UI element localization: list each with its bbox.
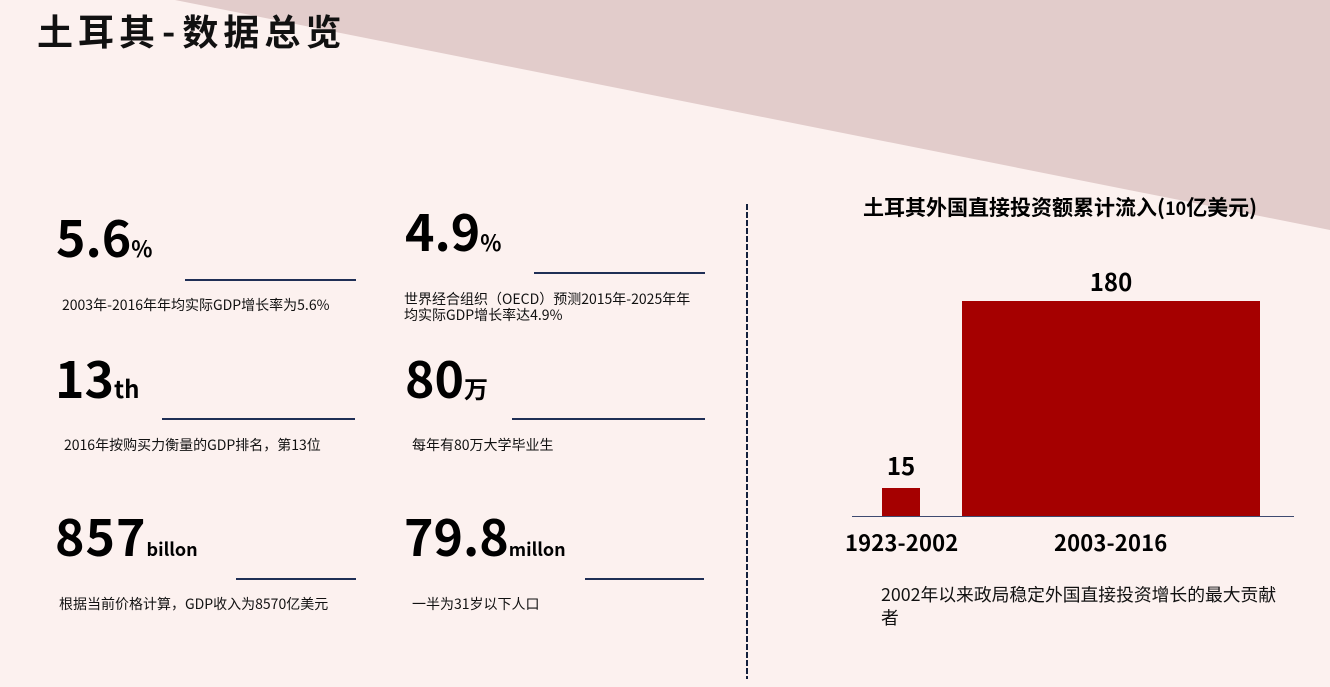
value: 80万	[405, 341, 488, 413]
stat: 79.8 millon	[404, 499, 704, 614]
stat: 80万	[405, 341, 705, 455]
value: 857billon	[55, 499, 198, 571]
description: 2003年-2016年年均实际GDP增长率为5.6%	[62, 295, 329, 315]
description: 根据当前价格计算，GDP收入为8570亿美元	[59, 594, 328, 614]
category: 2003-2016: 2003-2016	[1054, 526, 1167, 558]
bar: 2003-2016	[962, 301, 1260, 516]
stat: 5.6%	[56, 200, 356, 315]
description: 每年有80万大学毕业生	[412, 435, 554, 455]
title: 土耳其-数据总览	[37, 4, 346, 56]
rule	[162, 418, 355, 420]
description: 一半为31岁以下人口	[412, 594, 540, 614]
description: 世界经合组织（OECD）预测2015年-2025年年	[404, 289, 690, 309]
description	[404, 289, 690, 325]
value: 13th	[55, 341, 139, 413]
dashed divider	[746, 204, 748, 679]
category: 1923-2002: 1923-2002	[845, 526, 958, 558]
description: 均实际GDP增长率达4.9%	[404, 305, 562, 325]
rule	[185, 279, 356, 281]
stat: 13th	[55, 341, 355, 455]
bar chart	[845, 263, 1294, 558]
rule	[236, 578, 356, 580]
axis	[852, 516, 1294, 517]
value: 15: 15	[887, 447, 915, 482]
bar: 1923-2002	[882, 488, 920, 516]
chart title: 土耳其外国直接投资额累计流入(10亿美元)	[863, 192, 1257, 222]
value: 5.6%	[56, 200, 152, 272]
stat: 857 billon	[55, 499, 356, 614]
value: 180: 180	[1090, 263, 1132, 298]
stat: 4.9%	[404, 194, 705, 325]
description: 2016年按购买力衡量的GDP排名，第13位	[64, 435, 321, 455]
value: 79.8millon	[404, 499, 566, 571]
rule	[534, 272, 705, 274]
value: 4.9%	[405, 194, 501, 266]
chart note: 2002年以来政局稳定外国直接投资增长的最大贡献者	[881, 581, 1276, 630]
rule	[585, 578, 704, 580]
rule	[512, 418, 705, 420]
